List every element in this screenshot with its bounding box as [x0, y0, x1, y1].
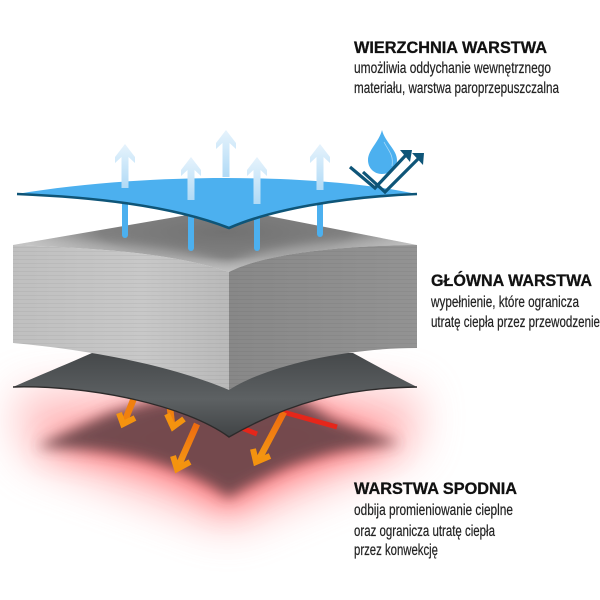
description: odbija promieniowanie cieplne	[354, 502, 513, 519]
red heat glow	[15, 375, 420, 528]
block texture	[13, 245, 417, 390]
text: top layer	[354, 39, 559, 97]
block left face	[13, 245, 229, 390]
vapour arrows rising	[115, 130, 330, 204]
icon: water drop with chevron arrows	[350, 130, 424, 192]
text: main layer	[430, 271, 600, 331]
block top face	[13, 208, 417, 272]
drop highlight	[384, 142, 392, 166]
block right face	[229, 245, 417, 390]
vapour arrow 5	[310, 144, 330, 190]
vapour arrow 3	[216, 130, 236, 177]
vapour arrow shafts below sheet	[125, 200, 320, 248]
vapour arrow 4	[247, 157, 267, 204]
blue top layer	[17, 178, 417, 228]
heading: WARSTWA SPODNIA	[354, 480, 517, 498]
dark bottom layer	[13, 353, 417, 437]
heading: WIERZCHNIA WARSTWA	[354, 39, 547, 57]
description: przez konwekcję	[354, 542, 438, 559]
vapour arrow 1	[115, 144, 135, 188]
heading: GŁÓWNA WARSTWA	[431, 271, 592, 290]
description: oraz ogranicza utratę ciepła	[354, 523, 495, 540]
floor shadow	[37, 400, 400, 498]
red reflected ray	[242, 412, 337, 434]
block top face highlight	[13, 245, 417, 272]
text: bottom layer	[354, 480, 517, 559]
chevron arrow back	[350, 155, 406, 188]
orange heat arrows	[119, 398, 284, 469]
orange arrow 1	[119, 398, 135, 424]
chevron arrow front	[363, 158, 419, 192]
grey main layer block	[13, 208, 417, 390]
vapour arrow 2	[181, 157, 201, 200]
water drop	[368, 130, 397, 174]
orange arrow 4	[253, 412, 284, 462]
orange arrow 3	[173, 424, 197, 469]
orange arrow 2	[167, 408, 184, 427]
